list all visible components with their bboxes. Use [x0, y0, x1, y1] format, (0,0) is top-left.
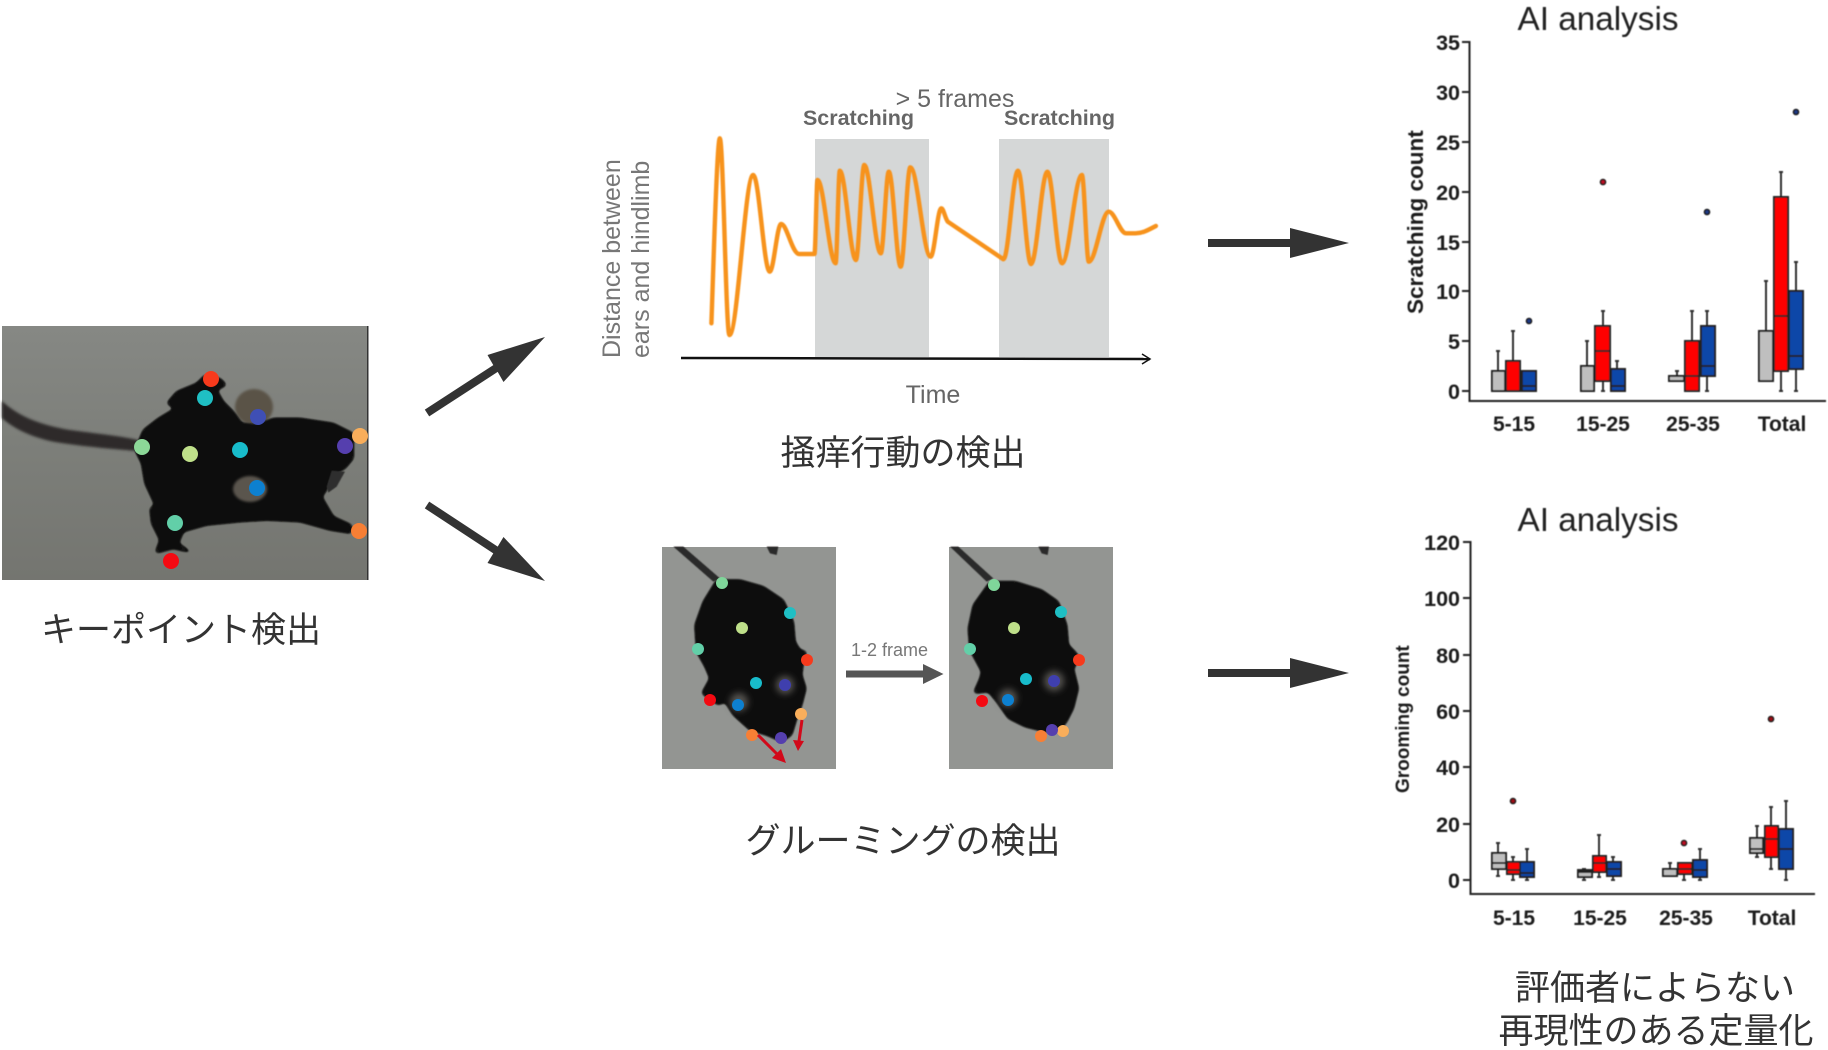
arrow: to grooming detection	[425, 502, 545, 581]
conclusion text: 再現性のある定量化	[1498, 1012, 1814, 1050]
y-axis label: ears and hindlimb	[627, 161, 655, 358]
arrow: to scratching detection	[425, 337, 545, 416]
heading: grooming detection: グルーミングの検出	[745, 822, 1061, 861]
time axis	[681, 354, 1150, 364]
mouse ear lower	[233, 476, 267, 502]
y-axis tick labels	[1436, 31, 1460, 404]
y-axis tick labels: 25	[1436, 131, 1460, 155]
red motion arrows	[758, 720, 804, 763]
group 25-35	[1669, 210, 1715, 391]
ear glow	[730, 676, 794, 711]
mouse tail and object	[950, 547, 1049, 582]
frames label: > 5 frames	[896, 85, 1014, 113]
mouse body	[695, 580, 807, 742]
mouse body	[968, 582, 1080, 732]
panel: grooming frame 2 photo	[949, 547, 1113, 769]
y-axis title: Grooming count	[1393, 645, 1414, 793]
x-axis labels: 25-35	[1659, 907, 1713, 930]
group total	[1759, 110, 1803, 391]
scratching interval shading 1	[815, 139, 929, 357]
chart title: AI analysis	[1517, 1, 1679, 38]
group 5-15	[1492, 318, 1536, 391]
arrow: grooming to analysis	[1208, 658, 1349, 688]
panel: scratching signal chart	[598, 85, 1156, 409]
keypoints	[692, 577, 813, 744]
x-axis labels: Total	[1748, 907, 1796, 930]
conclusion text: 評価者によらない	[1515, 969, 1795, 1008]
axes	[1462, 42, 1826, 401]
x-axis labels: Total	[1758, 413, 1806, 436]
group 25-35	[1663, 840, 1707, 880]
scratching label 2: Scratching	[1004, 106, 1115, 130]
keypoints	[134, 371, 368, 569]
y-axis label: Distance between	[598, 159, 626, 358]
y-axis tick labels	[1424, 531, 1460, 893]
y-axis tick labels: 35	[1436, 31, 1460, 55]
x-axis labels: 5-15	[1493, 907, 1535, 930]
group 5-15	[1492, 798, 1534, 880]
panel: keypoint detection photo	[2, 326, 368, 580]
mouse body	[135, 375, 353, 553]
y-axis title: Scratching count	[1403, 130, 1428, 314]
x-axis labels: 15-25	[1573, 907, 1627, 930]
heading: scratching detection: 掻痒行動の検出	[780, 434, 1026, 473]
heading: keypoint detection: キーポイント検出	[41, 611, 321, 650]
chart title: AI analysis	[1517, 502, 1679, 539]
y-axis tick labels: 100	[1424, 587, 1460, 611]
time label: Time	[906, 381, 960, 409]
keypoints	[964, 579, 1085, 742]
chart: grooming count box plot	[1393, 502, 1815, 930]
scratching interval shading 2	[999, 139, 1109, 357]
y-axis tick labels: 0	[1448, 380, 1460, 404]
panel: grooming frame 1 photo	[662, 547, 836, 769]
arrow: 1-2 frame step: 1-2 frame	[851, 640, 928, 660]
x-axis labels	[1493, 413, 1806, 436]
arrow: 1-2 frame step	[846, 640, 944, 684]
mouse ear top	[235, 389, 273, 425]
y-axis tick labels: 60	[1436, 700, 1460, 724]
x-axis labels: 25-35	[1666, 413, 1720, 436]
group 15-25	[1578, 835, 1621, 880]
ear glow	[999, 671, 1064, 707]
y-axis tick labels: 10	[1436, 280, 1460, 304]
conclusion text	[1498, 969, 1814, 1050]
y-axis tick labels: 0	[1448, 869, 1460, 893]
y-axis tick labels: 40	[1436, 756, 1460, 780]
y-axis tick labels: 30	[1436, 81, 1460, 105]
y-axis label	[598, 159, 655, 358]
group total	[1750, 716, 1793, 880]
x-axis labels: 5-15	[1493, 413, 1535, 436]
x-axis labels: 15-25	[1576, 413, 1630, 436]
group 15-25	[1581, 180, 1625, 391]
arrow: scratching to analysis	[1208, 228, 1349, 258]
scratching label 1: Scratching	[803, 106, 914, 130]
chart: scratching count box plot	[1403, 1, 1826, 436]
mouse forepaw	[327, 471, 345, 493]
y-axis tick labels: 15	[1436, 231, 1460, 255]
y-axis tick labels: 20	[1436, 813, 1460, 837]
y-axis tick labels: 120	[1424, 531, 1460, 555]
x-axis labels	[1493, 907, 1796, 930]
y-axis tick labels: 5	[1448, 330, 1460, 354]
y-axis tick labels: 80	[1436, 644, 1460, 668]
axes	[1463, 542, 1815, 894]
y-axis tick labels: 20	[1436, 181, 1460, 205]
mouse tail and object	[673, 547, 778, 582]
mouse tail	[2, 401, 138, 451]
distance signal line	[711, 138, 1156, 335]
